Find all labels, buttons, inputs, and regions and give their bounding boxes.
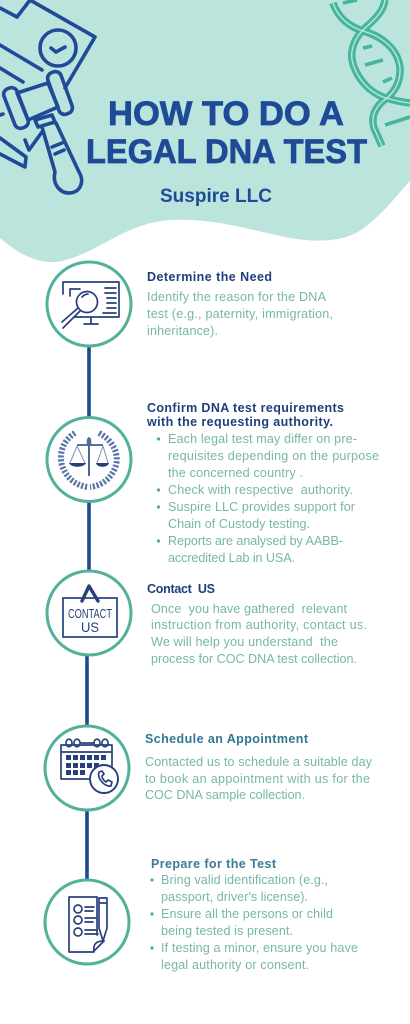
step 2 text: Check with respective authority. xyxy=(168,483,353,497)
step 1 text: test (e.g., paternity, immigration, xyxy=(147,307,333,321)
step 4 text: COC DNA sample collection. xyxy=(145,788,305,802)
step 3 text: Once you have gathered relevant xyxy=(151,602,348,616)
step 3 text: We will help you understand the xyxy=(151,635,338,649)
step 5 text: If testing a minor, ensure you have xyxy=(161,941,358,955)
subtitle: Suspire LLC xyxy=(160,185,272,207)
step 5 circle icon: checklist and pen xyxy=(45,880,129,964)
step 5 text: Ensure all the persons or child xyxy=(161,907,333,921)
title: HOW TO DO A xyxy=(108,95,344,133)
title: LEGAL DNA TEST xyxy=(86,133,367,171)
step 2 circle icon: scales in wreath xyxy=(47,418,131,502)
step 2 text: Confirm DNA test requirements xyxy=(147,401,344,415)
step 2 text: Reports are analysed by AABB- xyxy=(168,534,343,548)
step 3 circle icon: contact sign xyxy=(47,571,131,655)
icon: document and gavel xyxy=(0,0,95,193)
step 4 text: Contacted us to schedule a suitable day xyxy=(145,755,373,769)
step 1 text xyxy=(147,270,333,338)
step 2 text: accredited Lab in USA. xyxy=(168,551,295,565)
step 5 text: Bring valid identification (e.g., xyxy=(161,873,328,887)
step 2 text: Each legal test may differ on pre- xyxy=(168,432,357,446)
step 3 circle icon: contact sign: US xyxy=(81,620,99,635)
step 5 text xyxy=(150,857,358,972)
step 1 text: inheritance). xyxy=(147,324,218,338)
step 3 text: Contact US xyxy=(147,582,215,596)
step 2 text xyxy=(146,401,379,565)
step 5 text: Prepare for the Test xyxy=(151,857,277,871)
step 4 text: Schedule an Appointment xyxy=(145,732,309,746)
timeline connectors xyxy=(87,346,89,881)
step 5 text: being tested is present. xyxy=(161,924,293,938)
header wave background xyxy=(0,0,410,262)
icon: DNA helix xyxy=(333,0,410,146)
step 4 text: to book an appointment with us for the xyxy=(145,772,370,786)
step 2 text: the concerned country . xyxy=(168,466,303,480)
step 2 text: with the requesting authority. xyxy=(146,415,333,429)
step 5 text: legal authority or consent. xyxy=(161,958,309,972)
step 2 text: Chain of Custody testing. xyxy=(168,517,310,531)
step 1 text: Identify the reason for the DNA xyxy=(147,290,327,304)
step 5 text: passport, driver's license). xyxy=(161,890,308,904)
step 3 text xyxy=(147,582,367,666)
title xyxy=(86,95,367,171)
step 4 circle icon: calendar with phone xyxy=(45,726,129,810)
step 2 text: requisites depending on the purpose xyxy=(168,449,379,463)
step 1 circle icon: monitor with magnifier xyxy=(47,262,131,346)
step 3 text: process for COC DNA test collection. xyxy=(151,652,357,666)
step 2 text: Suspire LLC provides support for xyxy=(168,500,355,514)
step 1 text: Determine the Need xyxy=(147,270,272,284)
step 3 text: instruction from authority, contact us. xyxy=(151,618,367,632)
step 4 text xyxy=(145,732,373,802)
step 3 circle icon: contact sign: CONTACT xyxy=(68,606,112,621)
